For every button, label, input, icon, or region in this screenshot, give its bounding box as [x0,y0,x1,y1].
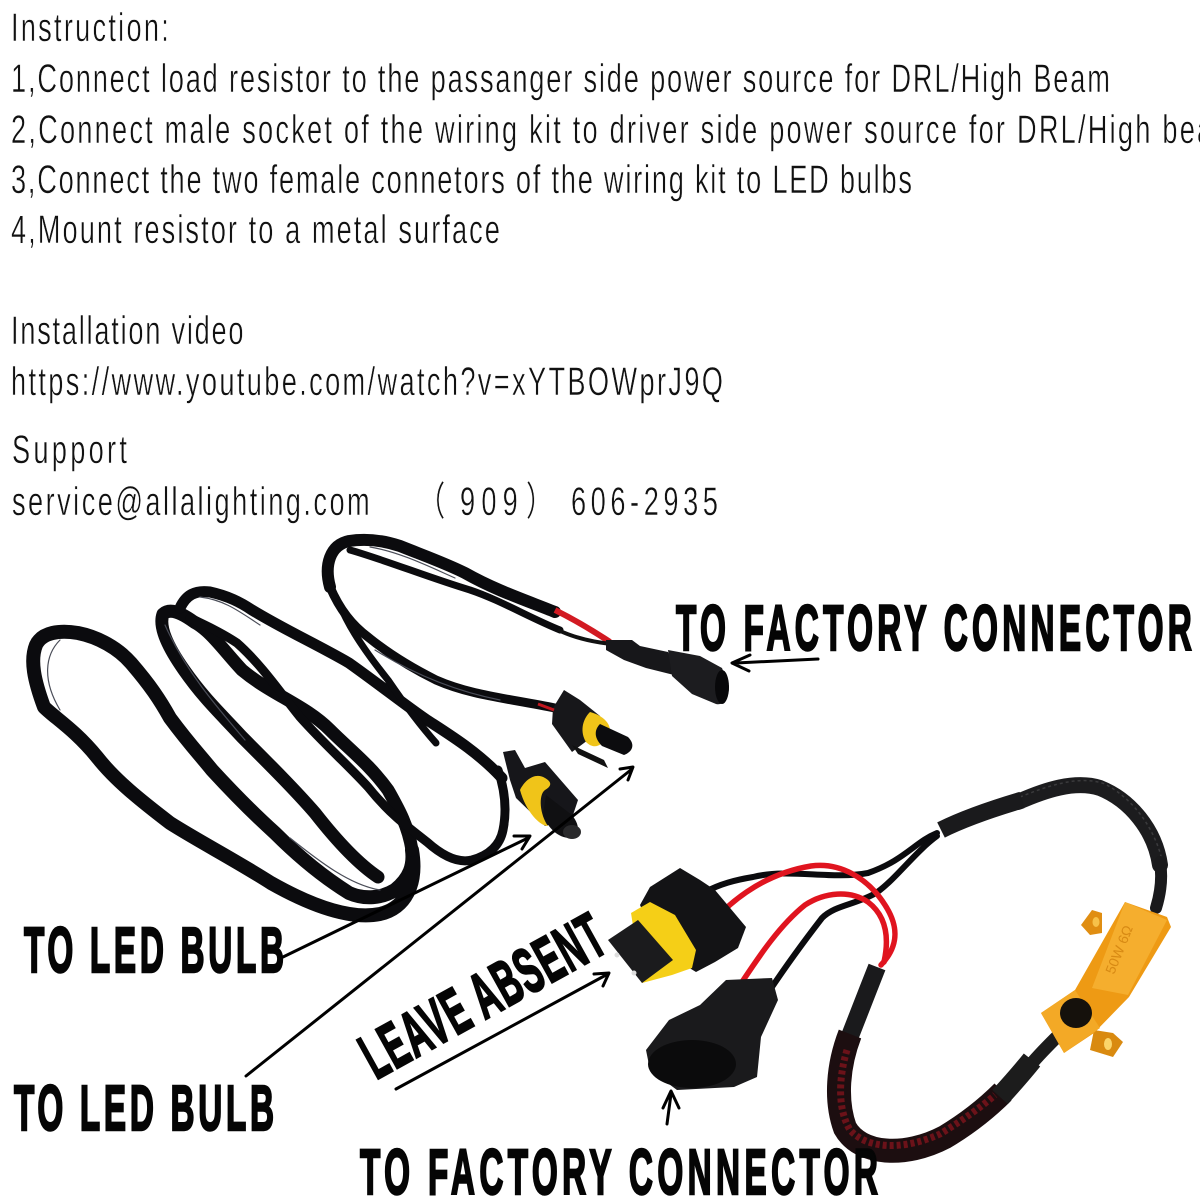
step 4: 4,Mount resistor to a metal surface [11,208,500,252]
mounting tab top [1081,910,1102,935]
arrow: to lower bulb connector [283,836,530,957]
lower heat shrink [850,967,877,1036]
resistor harness [608,781,1171,1151]
opening bracket: （ [418,480,445,524]
arrow: to female connector [396,973,609,1089]
step 1: 1,Connect load resistor to the passanger side power source for DRL/High Beam [11,57,1110,101]
resistor gold body [1041,902,1171,1057]
closing bracket: ） [526,480,553,524]
label: to LED bulb one: TO LED BULB [24,914,284,986]
label: to factory connector top: TO FACTORY CONNECTOR [676,592,1192,664]
support phone area code [418,480,553,524]
instruction text block [11,6,1200,252]
resistor lead [1028,1015,1078,1068]
installation video text [11,309,723,404]
body [1041,902,1171,1053]
instruction heading: Instruction: [11,6,169,50]
female connector [608,868,746,983]
mounting tab bottom [1090,1030,1123,1057]
support phone number: 606-2935 [571,480,718,524]
bulb connector upper [538,690,632,768]
arrow: to upper bulb connector [246,767,633,1076]
arrow: to top factory connector [732,655,818,671]
wiring kit photo illustration [33,540,1171,1151]
upper heat shrink [941,800,1022,830]
resistor label: 50W 6Ω [1102,923,1136,976]
connector head [668,650,729,704]
upper braid sleeve [1018,785,1160,865]
housing [640,868,746,972]
factory connector socket on wiring kit [606,640,729,704]
support email: service@allalighting.com [12,480,370,524]
label: leave absent: LEAVE ABSENT [348,900,617,1092]
step 3: 3,Connect the two female connetors of the wiring kit to LED bulbs [11,158,912,202]
area code digits: 909 [460,480,518,524]
red wires [722,865,895,965]
bulb connector lower [503,750,581,839]
support text [12,428,718,524]
video url: https://www.youtube.com/watch?v=xYTBOWprJ9Q [11,360,723,404]
arrow: to male plug [663,1091,679,1124]
inner cable loop [162,611,412,877]
yellow seal [583,712,610,746]
label: to LED bulb two: TO LED BULB [14,1072,274,1144]
male plug [646,978,778,1090]
tip [596,724,632,755]
yellow seal [520,776,550,826]
yellow ring [631,902,696,983]
upper cable loop [328,540,555,612]
outer cable loop [33,632,413,915]
opening [648,1040,736,1088]
lower braid sleeve [839,1034,1003,1151]
body [503,750,578,826]
second cable run [180,592,502,778]
connector sleeve [606,640,678,676]
cable highlights [48,547,500,890]
body [552,690,604,752]
support heading: Support [12,428,127,472]
resistor lead hole [1060,998,1092,1028]
red wire split [555,610,610,642]
shell [646,978,778,1090]
black wires [705,833,937,892]
tip [543,795,578,838]
face [608,920,673,983]
video heading: Installation video [11,309,244,353]
